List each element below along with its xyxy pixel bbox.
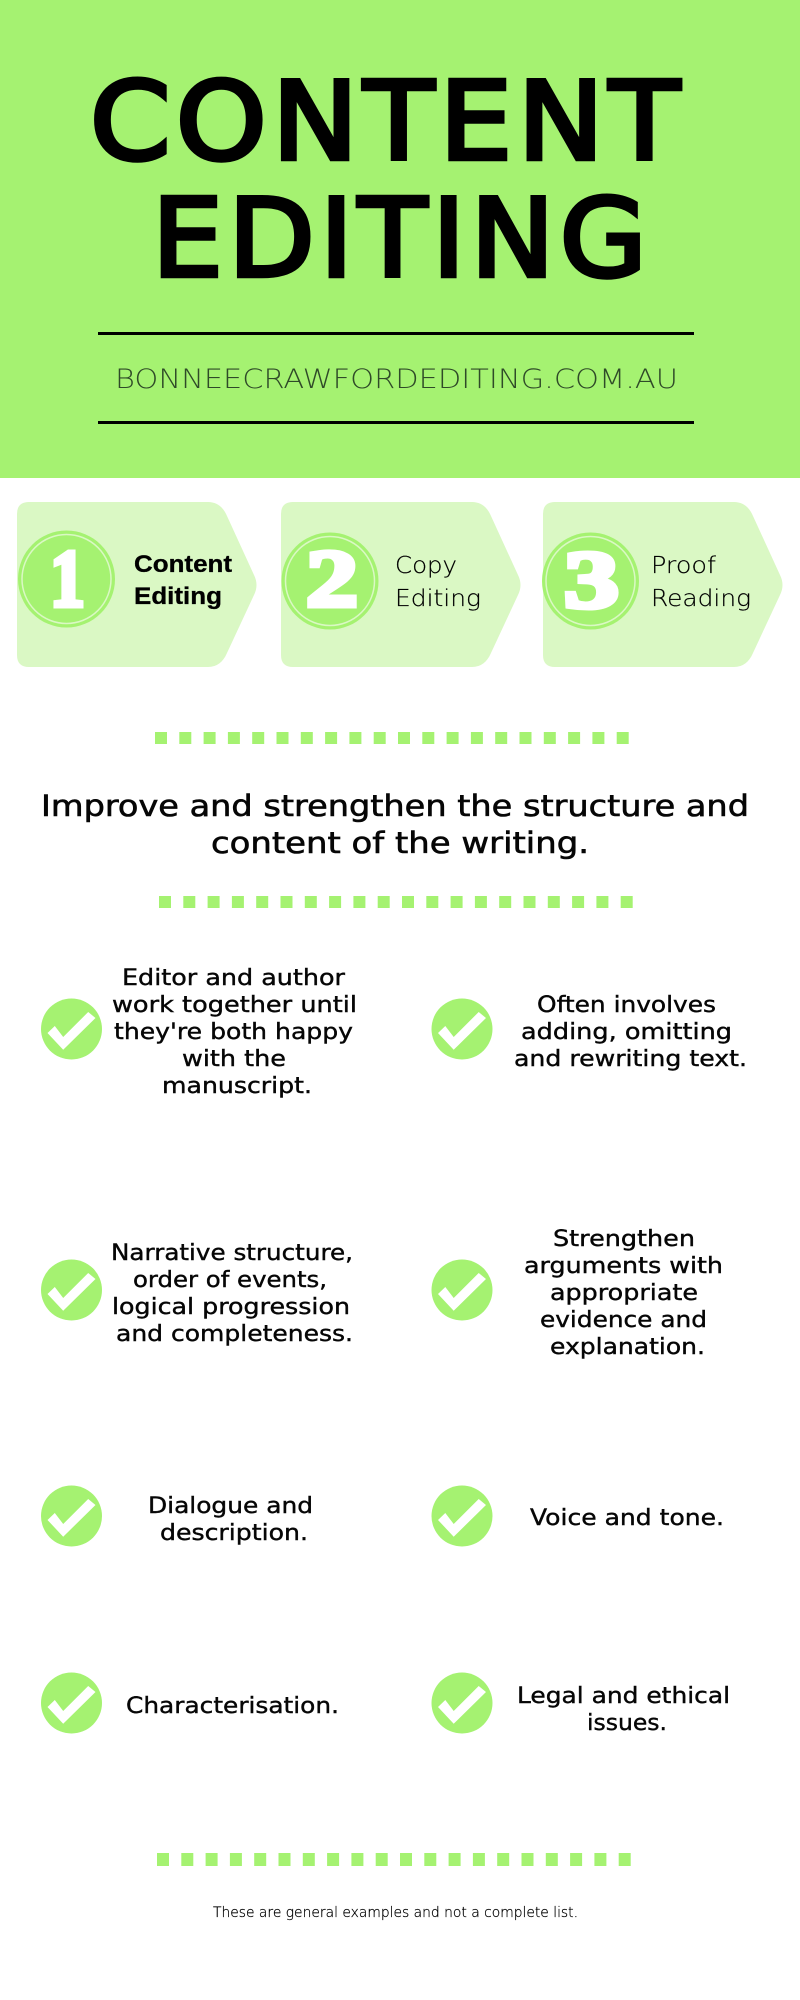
step label [395, 553, 481, 612]
icon: check mark [432, 1672, 492, 1734]
item text: Dialogue and [148, 1493, 313, 1519]
footnote: These are general examples and not a complete list. [213, 1905, 578, 1921]
step 3: proof reading [542, 502, 782, 667]
item text: work together until [112, 992, 357, 1018]
step label: Copy [395, 553, 457, 579]
step label: Editing [395, 586, 481, 612]
icon: check mark [432, 1260, 492, 1320]
step 2: copy editing [281, 502, 520, 667]
title [90, 60, 685, 302]
step 1: content editing [17, 502, 256, 667]
item text: Strengthen [553, 1226, 695, 1252]
item text: and rewriting text. [514, 1046, 747, 1072]
item text: they're both happy [114, 1019, 353, 1045]
title: CONTENT [90, 60, 685, 185]
list item: strengthen arguments [432, 1226, 723, 1360]
item text: description. [160, 1520, 308, 1546]
step label: Editing [134, 583, 222, 610]
icon: check mark [432, 998, 492, 1060]
item text: appropriate [550, 1280, 698, 1306]
icon: check mark [432, 1486, 492, 1546]
icon: check mark [41, 1672, 102, 1734]
item text [111, 1240, 353, 1347]
item text: adding, omitting [521, 1019, 732, 1045]
icon: number 1 badge: 1 [50, 533, 85, 624]
item text [148, 1493, 313, 1546]
item text: Editor and author [122, 965, 346, 991]
step label: Content [134, 551, 232, 578]
item text: evidence and [540, 1307, 707, 1333]
list item: characterisation [41, 1672, 339, 1734]
item text: issues. [587, 1710, 667, 1736]
step label: Reading [651, 586, 751, 612]
tagline: Improve and strengthen the structure and [41, 789, 749, 823]
list item: narrative structure [41, 1240, 353, 1347]
list item: adding, omitting, rewriting [432, 992, 747, 1072]
header panel [0, 0, 800, 478]
item text: with the [182, 1046, 286, 1072]
website address between rules [98, 332, 694, 424]
item text [514, 992, 747, 1072]
website address between rules: BONNEECRAWFORDEDITING.COM.AU [115, 364, 678, 395]
list item: editor and author [41, 965, 357, 1099]
item text [517, 1683, 730, 1736]
icon: check mark [41, 1260, 102, 1320]
item text: Often involves [537, 992, 716, 1018]
icon: number 1 badge [18, 530, 115, 628]
list item: voice and tone [432, 1486, 724, 1546]
icon: number 2 badge [282, 532, 378, 630]
item text: order of events, [133, 1267, 327, 1293]
step label [651, 553, 751, 612]
icon: check mark [41, 1486, 102, 1546]
item text: Legal and ethical [517, 1683, 730, 1709]
item text: explanation. [550, 1334, 705, 1360]
title: EDITING [152, 177, 652, 302]
list item: dialogue and description [41, 1486, 313, 1546]
item text [112, 965, 357, 1099]
item text [524, 1226, 723, 1360]
icon: number 3 badge [542, 532, 639, 630]
icon: number 3 badge: 3 [564, 534, 619, 625]
step label [134, 551, 232, 610]
item text: manuscript. [162, 1073, 312, 1099]
item text: Narrative structure, [111, 1240, 353, 1266]
item text: logical progression [112, 1294, 350, 1320]
tagline: content of the writing. [211, 826, 589, 860]
item text: arguments with [524, 1253, 723, 1279]
tagline [41, 789, 749, 860]
icon: number 2 badge: 2 [306, 533, 358, 624]
list item: legal and ethical issues [432, 1672, 730, 1736]
step label: Proof [651, 553, 717, 579]
icon: check mark [41, 998, 102, 1060]
item text: Characterisation. [126, 1693, 339, 1719]
item text: Voice and tone. [530, 1505, 724, 1531]
item text: and completeness. [116, 1321, 353, 1347]
